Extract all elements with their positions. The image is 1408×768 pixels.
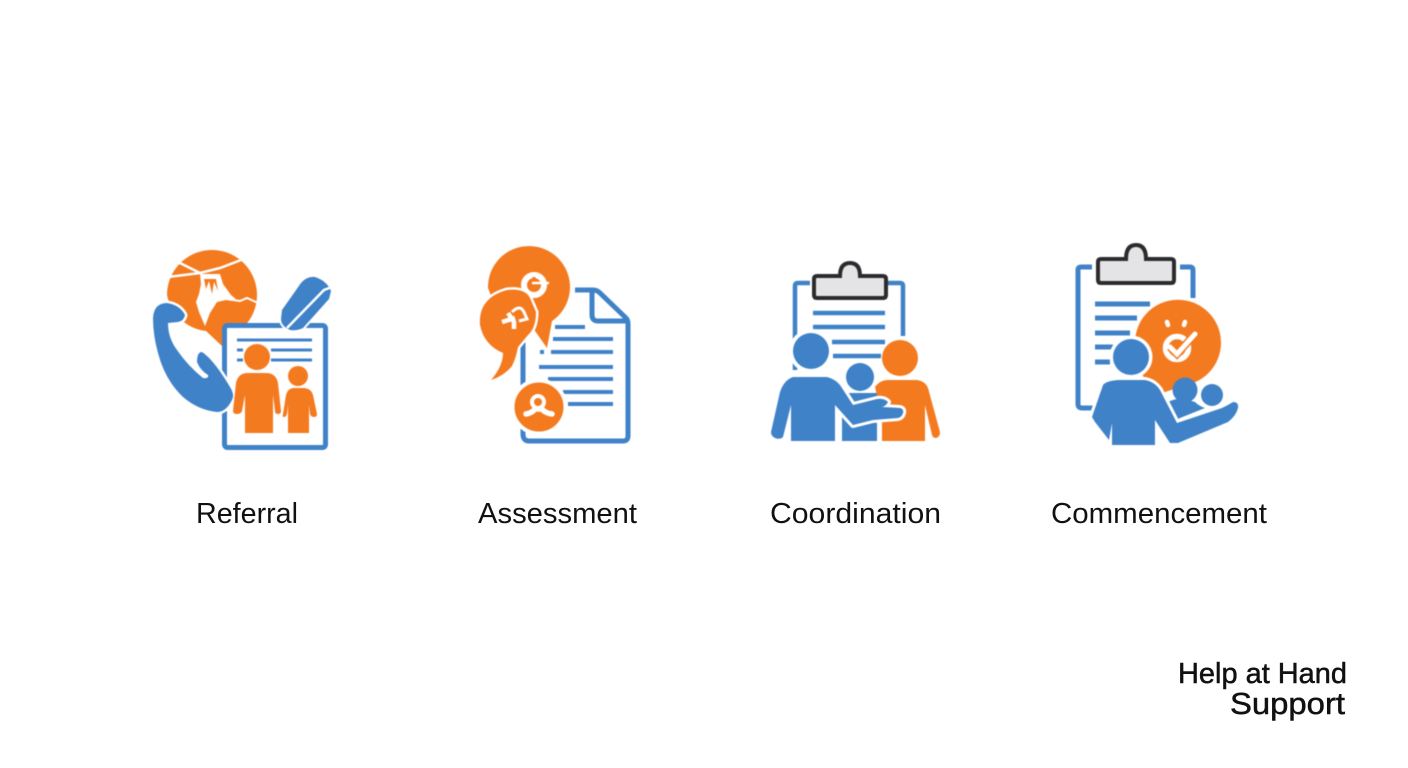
icon: small figures xyxy=(1168,378,1223,422)
brand text: Help at Hand Support: Support xyxy=(1230,686,1345,721)
icon: blue adult figure xyxy=(771,333,903,441)
brand text: Help at Hand Support xyxy=(1178,658,1347,721)
icon: pencil xyxy=(281,277,332,330)
label: Commencement: Commencement xyxy=(1051,498,1267,530)
icon: small speech bubble xyxy=(480,290,536,380)
icon: clipboard xyxy=(795,263,903,370)
brand text: Help at Hand Support: Help at Hand xyxy=(1178,658,1347,690)
panel: assessment xyxy=(480,246,628,441)
icon: child figure xyxy=(283,366,317,433)
panel: referral xyxy=(153,250,332,448)
icon: clipboard xyxy=(1078,245,1193,408)
icon: blue adult figure xyxy=(1092,339,1238,445)
icon: orange adult figure xyxy=(875,340,940,441)
icon: adult figure xyxy=(233,344,281,433)
icon: large speech bubble xyxy=(488,246,570,348)
panel: coordination xyxy=(771,263,940,441)
icon: orange person badge xyxy=(512,380,566,434)
icon: referral document xyxy=(224,326,326,448)
panel: commencement xyxy=(1078,245,1238,445)
icon: assessment document xyxy=(523,290,628,441)
icon: orange check bubble xyxy=(1135,300,1221,394)
label: Assessment: Assessment xyxy=(478,498,637,530)
label: Referral: Referral xyxy=(196,498,298,530)
icon: orange cracked circle xyxy=(167,250,258,346)
label: Coordination: Coordination xyxy=(770,498,941,530)
icon: child figure xyxy=(842,363,877,441)
icon: telephone handset xyxy=(153,303,233,412)
